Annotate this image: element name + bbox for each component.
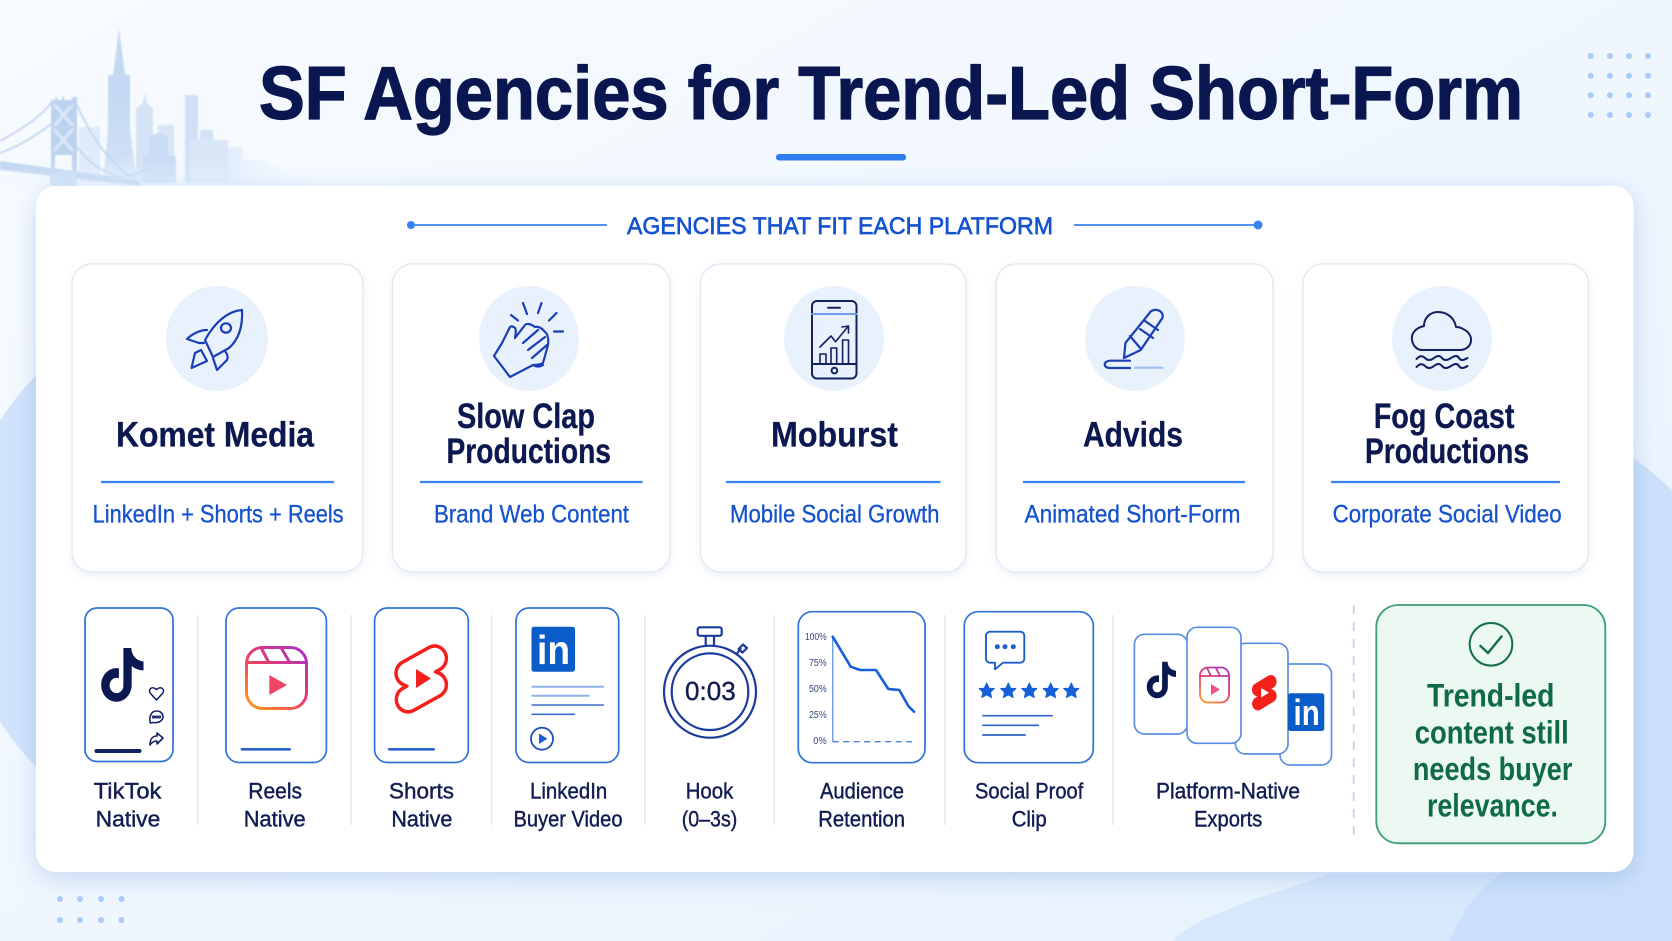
icon: TikTok logo: [101, 648, 144, 702]
line chart: retention curve: 100%: [805, 632, 827, 643]
panel: Slow Clap Productions card: Productions: [446, 432, 611, 471]
icon: rocket: [187, 310, 242, 370]
icon: small Reels: [1200, 668, 1229, 702]
icon: like comment share: [150, 688, 163, 745]
format: TikTok Native: TikTok: [94, 778, 162, 803]
format: Audience Retention chart: Audience: [820, 778, 904, 803]
format: LinkedIn Buyer Video: [514, 608, 622, 832]
format: Shorts Native: Native: [391, 807, 452, 832]
icon: small LinkedIn: in: [1294, 692, 1320, 733]
callout: buyer relevance: content still: [1415, 714, 1569, 750]
icon: clapping hands: [494, 303, 563, 377]
icon: phone with growth chart: [812, 301, 856, 378]
panel: Advids card: Animated Short-Form: [1024, 500, 1240, 528]
format: Shorts Native: Shorts: [389, 778, 454, 803]
panel: Slow Clap Productions card: [392, 264, 670, 572]
format: Platform-Native Exports: Exports: [1194, 807, 1262, 832]
decorative dot grid bottom left: [57, 896, 124, 923]
format: Hook stopwatch: 0:03: [685, 676, 736, 706]
format: Platform-Native Exports: Platform-Native: [1156, 778, 1300, 803]
panel: Advids card: [996, 264, 1273, 572]
panel: Advids card: Advids: [1083, 416, 1183, 454]
title: SF Agencies for Trend-Led Short-Form: [259, 51, 1523, 135]
icon: Reels logo: [246, 648, 306, 708]
format: Audience Retention chart: Retention: [818, 807, 905, 832]
icon: five stars: [979, 683, 1079, 698]
icon: LinkedIn logo: in: [537, 627, 570, 673]
format: Hook stopwatch: [664, 627, 756, 832]
callout: buyer relevance: relevance.: [1427, 788, 1558, 824]
format: Reels Native: [226, 608, 326, 832]
panel: Fog Coast Productions card: Productions: [1365, 432, 1529, 471]
panel: Fog Coast Productions card: [1303, 264, 1588, 572]
icon: check mark: [1470, 623, 1512, 666]
stacked phone cards: [1134, 627, 1332, 765]
format: Shorts Native: [375, 608, 468, 832]
San Francisco skyline and bridge illustration: [0, 29, 310, 187]
icon: cloud over fog waves: [1412, 312, 1471, 368]
format: Social Proof Clip: Clip: [1012, 807, 1047, 832]
format: Social Proof Clip: [964, 612, 1093, 832]
format: Hook stopwatch: Hook: [686, 778, 734, 803]
icon: small Shorts: [1252, 675, 1277, 710]
line chart: retention curve: 75%: [809, 658, 827, 669]
decorative dot grid top right: [1588, 53, 1651, 118]
panel: Slow Clap Productions card: Brand Web Content: [434, 500, 629, 528]
format: TikTok Native: [85, 608, 173, 832]
section heading with rules: [407, 213, 1262, 240]
panel: Moburst card: [700, 264, 966, 572]
format: Hook stopwatch: (0–3s): [682, 807, 737, 832]
format: LinkedIn Buyer Video: LinkedIn: [530, 778, 607, 803]
format: Platform-Native Exports: [1134, 627, 1332, 832]
panel: Komet Media card: [72, 264, 363, 572]
callout: buyer relevance: needs buyer: [1413, 751, 1572, 787]
panel: Komet Media card: Komet Media: [116, 416, 314, 454]
format: Reels Native: Native: [244, 807, 306, 832]
panel: Moburst card: Mobile Social Growth: [730, 500, 940, 528]
title accent underline: [776, 154, 906, 160]
format: TikTok Native: Native: [96, 807, 160, 832]
line chart: retention curve: 0%: [813, 736, 827, 747]
callout: buyer relevance: [1376, 605, 1605, 843]
line chart: retention curve: [805, 632, 915, 747]
format: Reels Native: Reels: [248, 778, 302, 803]
icon: Shorts logo: [396, 646, 446, 712]
icon: play button: [531, 728, 553, 750]
icon: chat bubble: [986, 632, 1024, 669]
icon: stopwatch: [664, 627, 756, 738]
line chart: retention curve: 50%: [809, 684, 827, 695]
format: Social Proof Clip: Social Proof: [975, 778, 1084, 803]
icon: small TikTok: [1147, 662, 1176, 698]
callout: buyer relevance: Trend-led: [1427, 678, 1554, 714]
panel: Komet Media card: LinkedIn + Shorts + Reels: [93, 500, 344, 528]
line chart: retention curve: 25%: [809, 710, 827, 721]
panel: Slow Clap Productions card: Slow Clap: [457, 397, 595, 436]
panel: Fog Coast Productions card: Corporate Social Video: [1333, 500, 1562, 528]
main white panel: [36, 186, 1634, 872]
icon: marker pen: [1105, 310, 1163, 368]
format: LinkedIn Buyer Video: Buyer Video: [514, 807, 622, 832]
panel: Moburst card: Moburst: [771, 416, 898, 454]
section heading with rules: AGENCIES THAT FIT EACH PLATFORM: [627, 213, 1053, 240]
panel: Fog Coast Productions card: Fog Coast: [1374, 397, 1515, 436]
format: Audience Retention chart: [798, 612, 925, 832]
